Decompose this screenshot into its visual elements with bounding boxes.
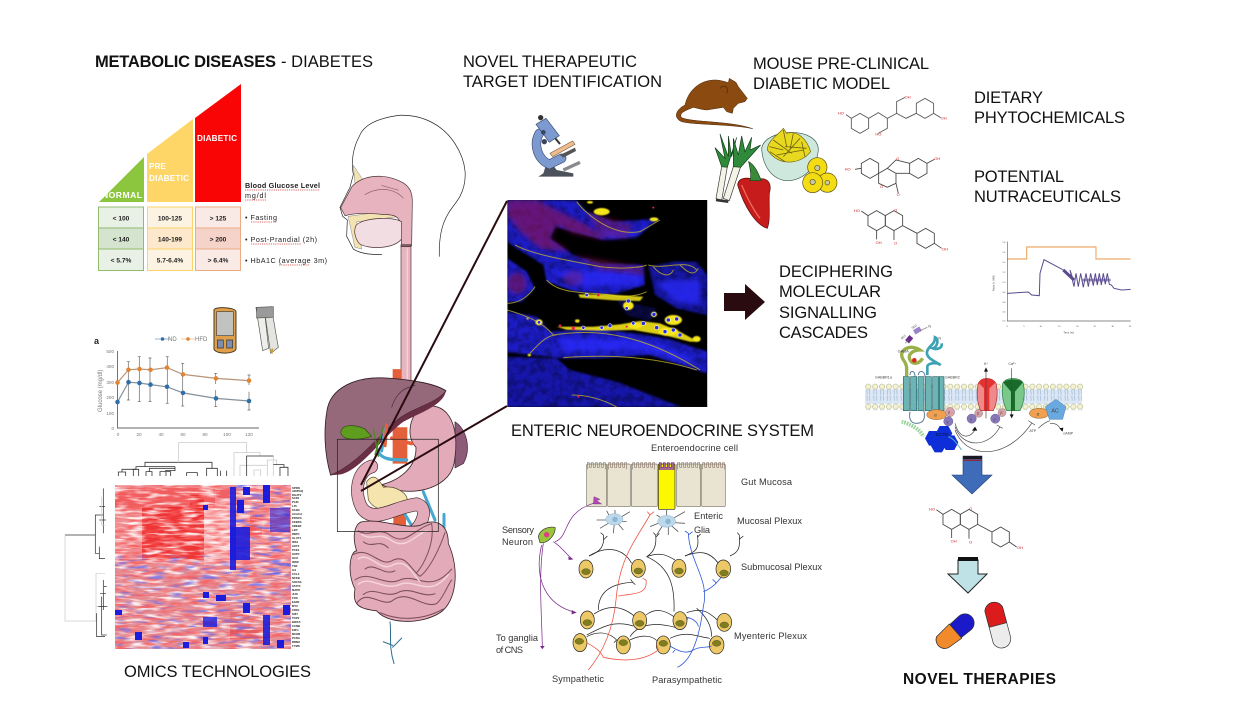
black neurites [587,533,743,643]
molecule: isoflavone: O [894,241,897,246]
blood glucose legend [245,181,327,265]
ND series [118,382,249,402]
blood glucose legend: mg/dl [245,191,266,200]
line chart: glucose tolerance: 40 [158,432,164,437]
pathway labels: GABBR2 [945,376,960,380]
heatmap gene labels: KI67 [292,612,298,616]
zoom box [337,439,438,532]
pathway labels: N [928,325,931,329]
diagram labels: Myenteric Plexux [734,631,807,641]
diagram labels: To ganglia [496,633,539,643]
heatmap gene labels: TNF [292,564,298,568]
panel: calcium trace chart: 5 [1023,326,1025,328]
purple staining [507,200,643,294]
molecule: coumestrol: OH [934,156,940,161]
heatmap gene labels: BIRC5 [292,620,301,624]
line chart: glucose tolerance: 200 [106,395,114,400]
line chart: glucose tolerance: 400 [106,364,114,369]
molecule: isoflavone: O [894,207,897,212]
enteric neurons [573,559,732,654]
pathway labels: SD1 [900,333,907,340]
diagram labels: Sensory [502,525,534,535]
line chart: glucose tolerance: Glucose (mg/dl) [98,370,104,412]
pathway labels: β [977,412,979,416]
heatmap gene labels: RBP4 [292,532,300,536]
pathway labels: ATP [1029,429,1037,433]
heatmap gene labels: RRM2 [292,640,300,644]
tissue mottling [507,200,707,407]
diagram labels: Gut Mucosa [741,477,793,487]
heading: novel therapeutic target identification: TARGET IDENTIFICATION [463,73,662,91]
pathway labels: α [1037,411,1040,416]
arrow: blue down arrow [952,456,992,494]
molecule: lignan [838,95,947,136]
line chart: glucose tolerance: 0 [117,432,120,437]
spleen [455,422,467,468]
heatmap gene labels: FOS [292,596,298,600]
heading: dietary phytochemicals: DIETARY [974,89,1043,107]
panel: calcium trace chart: 1.6 [1002,252,1006,254]
panel: GPCR signalling pathway [865,323,1083,452]
heading: mouse pre-clinical diabetic model: DIABETIC MODEL [753,75,890,93]
pathway labels: K⁺ [984,362,988,366]
heatmap gene labels: GLUT4 [292,536,302,540]
heatmap gene labels: STAT3 [292,584,301,588]
heatmap gene labels: LPL [292,504,298,508]
icon: test strips [256,307,278,354]
panel: enteric neuroendocrine system [496,422,822,685]
panel: mouse pre-clinical model [676,55,929,228]
potassium channel [977,378,997,411]
duodenum [357,467,424,531]
glucose stage triangle chart: PRE [149,162,166,171]
nasal cavity and pharynx [341,176,412,245]
heading: dietary phytochemicals: PHYTOCHEMICALS [974,109,1125,127]
heatmap gene labels: PCK1 [292,548,300,552]
heading: potential nutraceuticals: POTENTIAL [974,168,1064,186]
heatmap gene labels: EGR1 [292,600,300,604]
aorta [393,369,407,538]
heading: dietary phytochemicals [974,89,1125,127]
enteric glia cells [597,510,685,535]
heatmap [115,485,291,649]
arrow: micrograph to signalling [724,284,765,320]
head outline [340,115,465,256]
SD1 SD2 domains [905,335,913,343]
heatmap gene labels: INSR [292,560,299,564]
title: metabolic diseases: METABOLIC DISEASES [95,53,276,71]
heading: potential nutraceuticals: NUTRACEUTICALS [974,188,1121,206]
glucose stage triangle chart [99,84,241,202]
molecule: lignan: OH [941,116,947,121]
molecule: lead isoflavone [929,506,1023,550]
molecule: isoflavone: HO [854,208,860,213]
mucosa cells [587,464,725,509]
heatmap gene labels: FASN [292,508,299,512]
receptor helices [903,377,944,411]
HFD series [118,368,249,383]
molecule: lead isoflavone: HO [929,507,935,512]
top dendrogram [118,443,288,476]
line chart: glucose tolerance: a [94,336,100,346]
panel: calcium trace chart: 1.2 [1002,272,1006,274]
heatmap gene labels: SOCS3 [292,580,302,584]
yellow signal bands [507,202,700,407]
panel: calcium trace chart: 20 [1076,326,1079,328]
heading: deciphering molecular signalling cascades [779,263,893,342]
diagram: gut wall and plexuses [538,463,743,670]
calcium channel [1002,378,1024,411]
sympathetic red fibres [587,512,658,670]
heatmap gene labels: E2F1 [292,628,299,632]
blood glucose legend: • Fasting [245,213,277,222]
glucose threshold table: > 125 [210,216,227,222]
line chart: glucose tolerance: 100 [223,432,231,437]
line chart: glucose tolerance [94,336,259,437]
panel: calcium trace chart: 30 [1111,326,1115,328]
nuclei rings [537,293,682,337]
KCTD hexagon cluster [925,426,958,452]
pathway labels: cAMP [1063,431,1074,435]
infographic canvas [64,56,1132,685]
pathway labels: N [938,336,941,340]
connector lines from gut to micrograph [361,201,507,491]
arrow: light blue down arrow [948,557,987,593]
glucose threshold table: < 5.7% [111,258,131,264]
pathway labels: AC [1051,409,1059,415]
pathway labels: α [934,413,937,418]
molecule: lignan: HO [875,131,881,136]
panel: calcium trace chart: 0.4 [1002,311,1006,313]
pathway labels: γ [947,420,949,424]
heatmap gene labels: ADIPOQ [292,489,304,493]
panel: calcium trace chart: 35 [1129,326,1132,328]
title: metabolic diseases [95,53,373,71]
line chart: glucose tolerance: 20 [136,432,142,437]
heatmap gene labels: PCNA [292,636,300,640]
panel: calcium trace chart: 1.0 [1002,282,1006,284]
glucose threshold table: < 140 [113,236,130,244]
line chart: glucose tolerance: 0 [111,426,114,431]
glucose threshold table: < 100 [113,216,130,222]
heatmap gene labels: PPARG [292,516,302,520]
chart legend [155,337,208,343]
molecule: lignan: HO [838,110,844,115]
fluorescence trace [1007,260,1131,296]
heading: deciphering molecular signalling cascades: MOLECULAR [779,283,881,301]
molecule: coumestrol: HO [845,167,851,172]
panel: omics technologies [65,443,311,681]
cell membrane [865,384,1083,410]
molecule: lead isoflavone: O [969,506,972,511]
glucose stage triangle chart: DIABETIC [149,174,189,183]
icon: orange and blue capsule [936,614,974,648]
molecule: isoflavone: OH [942,246,948,251]
line chart: glucose tolerance: 100 [106,411,114,416]
heatmap gene labels: CCL2 [292,572,300,576]
line chart: glucose tolerance: 300 [106,380,114,385]
heatmap gene labels [292,486,304,648]
heatmap gene labels: MYC [292,604,298,608]
diagram labels: Enteric [694,511,723,521]
pale bone [348,165,400,249]
line chart: glucose tolerance: 500 [106,349,114,354]
icon: red pepper [738,162,770,228]
panel: calcium trace chart: 0.6 [1002,302,1006,304]
diagram labels: Sympathetic [552,674,604,684]
glucose threshold table: > 200 [210,236,227,244]
panel: calcium trace chart [992,242,1132,335]
heading: deciphering molecular signalling cascades: CASCADES [779,324,868,342]
panel: calcium trace chart: 15 [1058,326,1061,328]
left dendrogram [65,488,107,637]
glucose threshold table: 140-199 [158,236,182,244]
stimulus step line [1007,247,1131,259]
chart legend: ND [168,337,177,343]
heading: novel therapies: NOVEL THERAPIES [903,671,1056,688]
pathway labels: γ [970,417,972,421]
pathway labels: GABA [898,349,909,354]
blood glucose legend: • Post-Prandial (2h) [245,235,317,244]
icon: glucometer [214,308,236,353]
sensory neuron and fibres [538,497,602,649]
KCTD hexagon cluster: KCTD [936,432,949,437]
molecule: isoflavone [854,207,948,251]
icon: yellow slices [803,158,837,193]
panel: digestive tract anatomy [325,115,467,664]
heatmap gene labels: CCNB [292,624,300,628]
pathway labels: β [1000,411,1002,415]
heading: deciphering molecular signalling cascades: SIGNALLING [779,304,877,322]
glucose stage triangle chart: DIABETIC [197,134,237,143]
gallbladder [341,426,372,439]
heading: mouse pre-clinical diabetic model [753,55,929,93]
axes [1007,242,1131,321]
heatmap gene labels: DGAT2 [292,493,302,497]
pathway labels: β [948,411,950,415]
esophagus [401,245,411,387]
panel: calcium trace chart: 1.4 [1002,262,1006,264]
diagram labels [496,443,822,685]
diagram labels: Parasympathetic [652,675,722,685]
glucose stage triangle chart: NORMAL [102,190,142,200]
heatmap gene labels: NFKB [292,576,300,580]
small intestine [350,521,455,621]
heatmap gene labels: CDK1 [292,608,300,612]
glucose threshold table: > 6.4% [208,258,228,264]
heatmap gene labels: MAPK [292,588,300,592]
oral cavity [355,218,402,247]
heatmap gene labels: GCK [292,556,298,560]
heading: omics technologies: OMICS TECHNOLOGIES [124,663,311,681]
stomach [382,406,456,491]
diagram labels: Submucosal Plexux [741,562,822,572]
molecule: coumestrol [845,156,940,197]
icon: red and white capsule [985,602,1011,648]
micrograph: confocal gut section [507,200,707,407]
molecule: lead isoflavone: OH [951,539,957,544]
pathway labels: SD2 [911,323,918,330]
molecule: lignan: OH [905,95,911,100]
icon: bowl of yellow beans [762,128,818,181]
parasympathetic blue fibres [670,531,722,667]
panel: calcium trace chart: 10 [1039,326,1043,328]
panel: metabolic diseases - diabetes [94,53,373,437]
blood glucose legend: • HbA1C (average 3m) [245,256,327,265]
pathway labels [875,323,1074,435]
glucose threshold table: 100-125 [158,216,182,222]
channel arrows and inhibitory lines [955,368,1062,452]
heatmap gene labels: PLIN [292,500,298,504]
panel: calcium trace chart: Time (m) [1063,331,1074,335]
title: metabolic diseases: - DIABETES [281,53,373,71]
icon: mouse [676,78,753,129]
heatmap gene labels: SPRN [292,486,300,490]
heatmap gene labels: LEP [292,528,298,532]
molecule: isoflavone: OH [876,240,882,245]
heading: enteric neuroendocrine system: ENTERIC NEUROENDOCRINE SYSTEM [511,422,814,440]
glucose threshold table: 5.7-6.4% [157,258,183,264]
panel: calcium trace chart: 1.8 [1002,242,1006,244]
heatmap gene labels: SCD1 [292,496,300,500]
liver [325,378,446,475]
diagram labels: Neuron [502,537,533,547]
diagram labels: of CNS [496,645,523,655]
icon: microscope [536,115,580,177]
line chart: glucose tolerance: 120 [245,432,253,437]
heading: novel therapeutic target identification: NOVEL THERAPEUTIC [463,53,637,71]
line chart: glucose tolerance: 80 [202,432,208,437]
heading: novel therapeutic target identification [463,53,662,91]
heatmap gene labels: G6PC [292,552,300,556]
diagram labels: Enteroendocrine cell [651,443,738,453]
error bars [127,357,250,410]
molecule: coumestrol: O [880,184,883,189]
heatmap gene labels: JUN [292,592,298,596]
diagram labels: Glia [694,525,711,535]
pathway labels: GABBR1a [875,376,893,380]
heading: mouse pre-clinical diabetic model: MOUSE PRE-CLINICAL [753,55,929,73]
heatmap gene labels: IRS1 [292,540,299,544]
microvilli [587,463,724,469]
molecule: coumestrol: O [897,192,900,197]
bright nuclei band [550,225,700,365]
molecule: lead isoflavone: O [969,539,972,544]
nerve branch [383,622,402,664]
pathway labels: γ [994,417,996,421]
blue vessels [377,429,444,531]
molecule: lead isoflavone: OH [1017,545,1023,550]
chart legend: HFD [195,337,208,343]
blood glucose legend: Blood Glucose Level [245,181,320,190]
panel: calcium trace chart: 0.8 [1002,292,1006,294]
pathway labels: Ca²⁺ [1008,362,1016,366]
pancreas [367,477,407,510]
heatmap gene labels: TOP2 [292,616,300,620]
glucose threshold table [98,207,240,270]
panel: calcium trace chart: 25 [1093,326,1097,328]
yellow cell clusters [526,201,701,356]
heatmap gene labels: AKT2 [292,544,300,548]
panel: calcium trace chart: 0.0 [1002,321,1006,323]
heatmap gene labels: ACACA [292,512,302,516]
heading: potential nutraceuticals [974,168,1121,206]
molecule: coumestrol: O [896,156,899,161]
line chart: glucose tolerance: 60 [180,432,186,437]
panel: calcium trace chart: Ratio (+ 340) [992,275,996,291]
heatmap gene labels: MCM2 [292,632,301,636]
heading: deciphering molecular signalling cascades: DECIPHERING [779,263,893,281]
red dots [559,207,654,398]
G protein subunits [927,399,1066,426]
icon: leeks [715,134,761,202]
receptor extracellular domains [902,337,942,437]
heatmap gene labels: IL6 [292,568,296,572]
diagram labels: Mucosal Plexux [737,516,802,526]
blue tissue [507,200,707,407]
panel: calcium trace chart: 0 [1007,326,1009,328]
panel: dietary phytochemicals [838,89,1125,251]
heatmap gene labels: SREBF [292,524,302,528]
red and blue clusters [115,488,264,640]
neuron nuclei [575,568,729,646]
heatmap gene labels: TYMS [292,644,300,648]
heatmap gene labels: CEBPA [292,520,302,524]
